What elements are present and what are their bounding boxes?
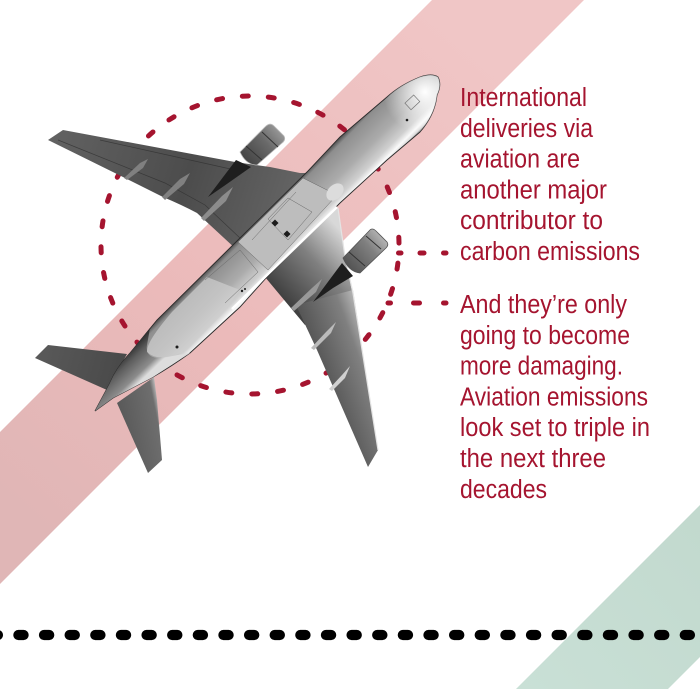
text block: international deliveries: another major: [460, 176, 607, 204]
wing box highlight: [232, 207, 337, 309]
wing box root bump: [323, 180, 347, 204]
text block: international deliveries: deliveries via: [460, 115, 594, 143]
upper wing panel lines: [58, 140, 240, 238]
lower wing leading edge highlight: [338, 208, 378, 450]
text block: international deliveries: International: [460, 84, 587, 112]
upper engine detail: [246, 132, 278, 160]
wing box panel: [238, 178, 337, 270]
lower engine: [343, 229, 388, 273]
upper wing: [48, 130, 307, 250]
dashed circle around plane: [93, 88, 407, 402]
panel details: [176, 119, 408, 348]
airplane: [35, 75, 440, 473]
lower wing root: [265, 208, 353, 325]
text block: international deliveries: carbon emissions: [460, 238, 640, 266]
text block: emissions to triple: going to become: [460, 322, 630, 350]
text block: international deliveries: contributor to: [460, 207, 603, 235]
panel lines: [205, 192, 312, 303]
nose highlight: [365, 75, 440, 150]
text block: emissions to triple: [460, 291, 650, 504]
rear fuselage cone: [95, 328, 190, 411]
text block: international deliveries: [460, 84, 640, 266]
fuselage: [95, 75, 440, 411]
cockpit window panel: [405, 95, 420, 110]
pink diagonal band: [0, 0, 584, 584]
lower tailplane: [117, 377, 162, 473]
connector: first text: [398, 250, 446, 256]
text block: emissions to triple: the next three: [460, 445, 606, 473]
connector: second text: [388, 300, 446, 306]
text block: international deliveries: aviation are: [460, 146, 580, 174]
text block: emissions to triple: look set to triple in: [460, 414, 650, 442]
left tailplane: [35, 345, 127, 390]
flap fairings: [124, 159, 350, 391]
rear light belly: [147, 277, 240, 358]
lower engine detail: [349, 236, 381, 266]
text block: emissions to triple: more damaging.: [460, 353, 623, 381]
black dotted divider: [0, 630, 700, 640]
text block: emissions to triple: Aviation emissions: [460, 383, 648, 411]
lower engine pylon: [313, 263, 353, 302]
lower wing outer: [296, 290, 378, 467]
text block: emissions to triple: decades: [460, 476, 547, 504]
upper engine: [240, 124, 285, 165]
green diagonal band: [516, 505, 700, 689]
upper engine pylon: [208, 160, 251, 197]
text block: emissions to triple: And they’re only: [460, 291, 627, 319]
